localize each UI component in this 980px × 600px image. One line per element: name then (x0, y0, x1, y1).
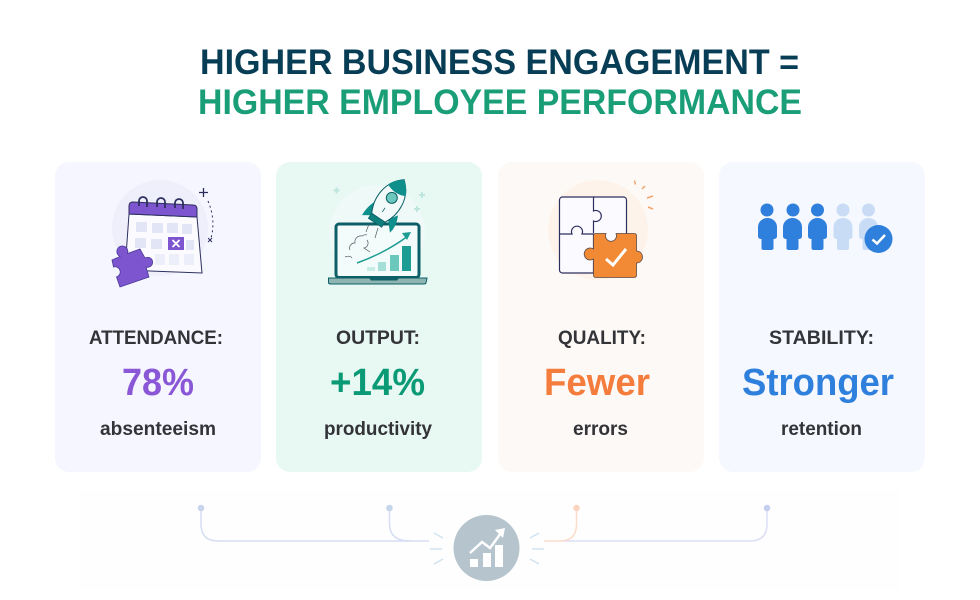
connector dots (198, 505, 770, 511)
quality label: QUALITY: (558, 328, 646, 349)
icon: growth chart badge (454, 515, 520, 581)
output value: +14% (330, 362, 425, 404)
stability label: STABILITY: (769, 328, 874, 349)
attendance caption: absenteeism (100, 419, 216, 440)
panel: output (276, 162, 482, 472)
connector: quality (544, 508, 576, 541)
rays (430, 533, 544, 564)
connector: stability (563, 508, 767, 541)
title: HIGHER EMPLOYEE PERFORMANCE (198, 83, 802, 122)
icon: puzzle with check (548, 180, 653, 280)
stability value: Stronger (742, 362, 894, 404)
attendance label: ATTENDANCE: (89, 328, 223, 349)
icon: people with check badge (758, 204, 892, 253)
output caption: productivity (324, 419, 432, 440)
icon: rocket and laptop (328, 171, 427, 284)
connector: attendance (201, 508, 429, 541)
output label: OUTPUT: (336, 328, 420, 349)
stability caption: retention (781, 419, 862, 440)
connector diagram (80, 490, 900, 590)
title (198, 43, 802, 122)
panel: stability (719, 162, 925, 472)
panel: attendance (55, 162, 261, 472)
quality value: Fewer (544, 362, 650, 404)
quality caption: errors (573, 419, 628, 440)
attendance value: 78% (122, 362, 194, 404)
icon: calendar and puzzle piece (112, 180, 213, 287)
title: HIGHER BUSINESS ENGAGEMENT = (200, 43, 799, 82)
panel: quality (498, 162, 704, 472)
